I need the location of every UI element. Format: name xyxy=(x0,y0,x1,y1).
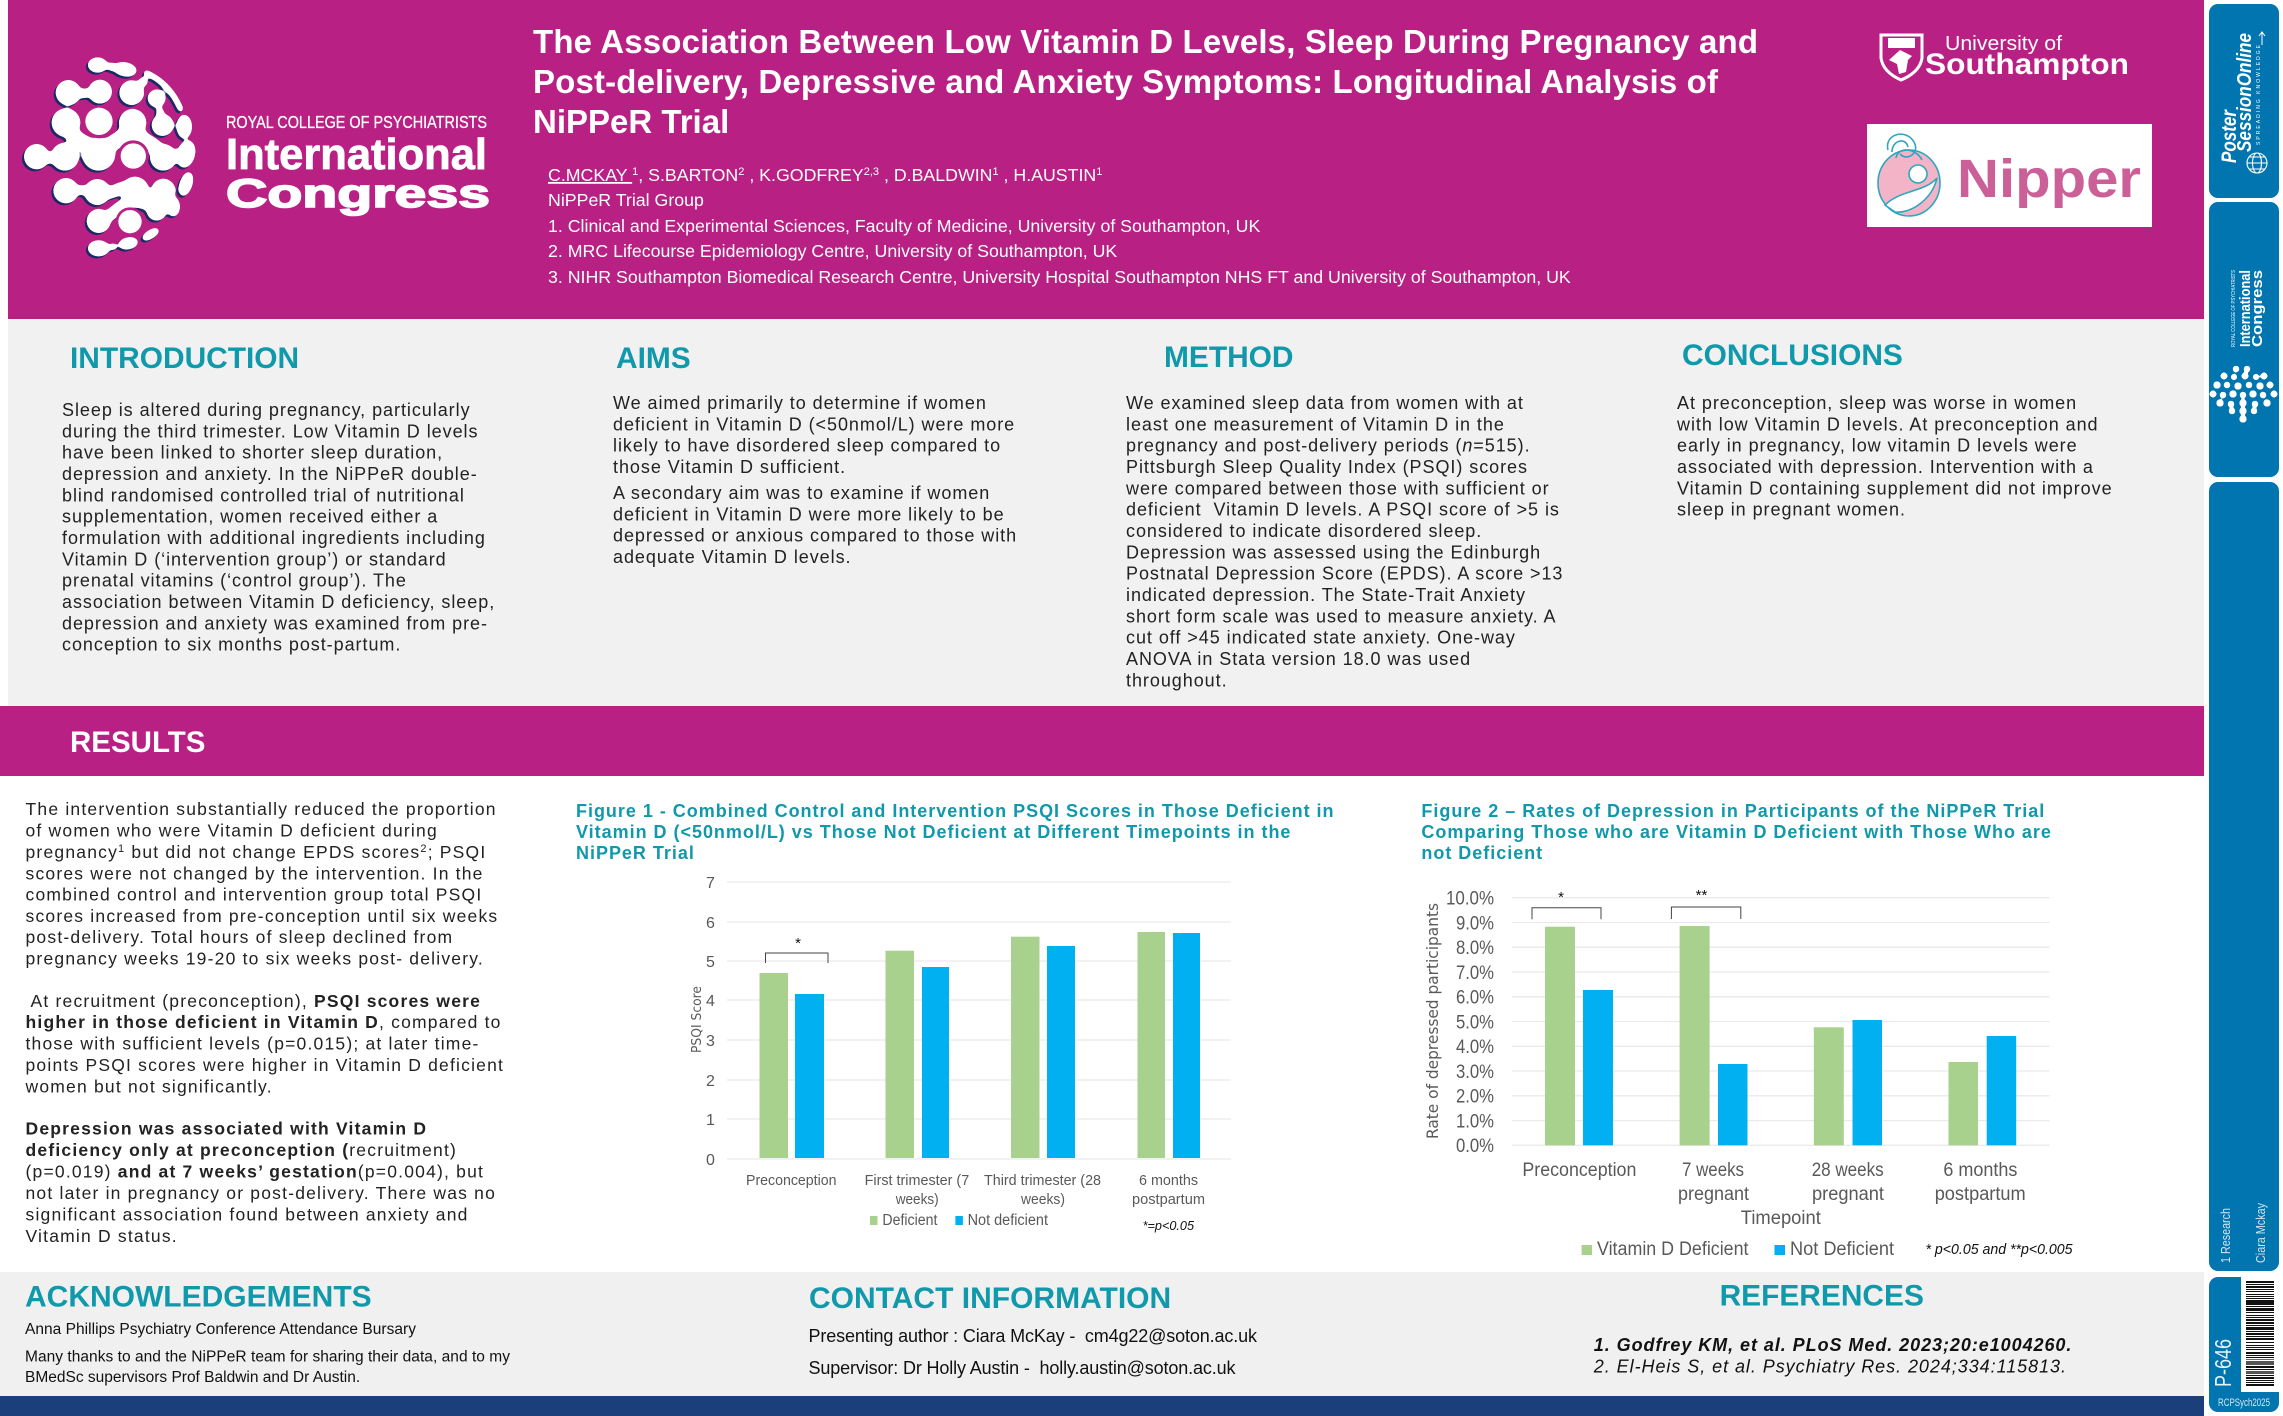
logo: NiPPeR xyxy=(1867,124,2152,227)
text: introduction body xyxy=(62,400,495,655)
category labels: postpartum xyxy=(1935,1184,2026,1205)
category labels: 6 months xyxy=(1139,1172,1198,1189)
bar chart: rates of depression xyxy=(1423,887,2073,1260)
text: method body: Depression was assessed using the Edinburgh xyxy=(1126,542,1541,562)
text: method body: indicated depression. The State-Trait Anxiety xyxy=(1126,585,1526,605)
text: contact details: Presenting author : Ciara McKay - cm4g22@soton.ac.uk xyxy=(808,1326,1258,1346)
text: method body: short form scale was used to measure anxiety. A xyxy=(1126,606,1556,626)
figure 1 title: Vitamin D (<50nmol/L) vs Those Not Deficient at Different Timepoints in the xyxy=(576,822,1291,842)
legend xyxy=(870,1212,1049,1229)
text: conclusions body: with low Vitamin D levels. At preconception and xyxy=(1676,414,2099,434)
footer panel background xyxy=(0,1272,2204,1396)
text: method body: Pittsburgh Sleep Quality Index (PSQI) scores xyxy=(1126,457,1528,477)
y axis ticks: 1.0% xyxy=(1456,1111,1494,1132)
text: conclusions body: Vitamin D containing supplement did not improve xyxy=(1677,478,2113,498)
heading: acknowledgements: ACKNOWLEDGEMENTS xyxy=(25,1281,372,1314)
text: results body: scores were not changed by the intervention. In the xyxy=(26,863,484,883)
y axis ticks: 0.0% xyxy=(1456,1136,1494,1157)
icon: stag in shield xyxy=(1888,38,1915,74)
y axis ticks: 1 xyxy=(706,1112,715,1129)
sidebar panel: poster number and barcode xyxy=(2209,1277,2280,1412)
icon: globe xyxy=(2247,153,2267,173)
sidebar logo text: Poster: Poster xyxy=(2218,109,2241,163)
y axis ticks: 4.0% xyxy=(1456,1037,1494,1058)
text: results body: Depression was associated with Vitamin D xyxy=(26,1119,427,1139)
y axis ticks: 2 xyxy=(706,1073,715,1090)
text: introduction body: conception to six months post-partum. xyxy=(62,635,401,655)
authors and affiliations: 3. NIHR Southampton Biomedical Research Centre, University Hospital Southampton NHS FT and University of Southampton, UK xyxy=(548,267,1571,287)
sidebar logo text: SessionOnline: SessionOnline xyxy=(2234,33,2256,152)
legend: Not deficient xyxy=(968,1212,1049,1229)
text: conclusions body: At preconception, sleep was worse in women xyxy=(1677,393,2077,413)
text: results body: of women who were Vitamin D deficient during xyxy=(26,820,438,840)
category labels: weeks) xyxy=(895,1191,939,1208)
text: acknowledgements: Many thanks to and the NiPPeR team for sharing their data, and to my xyxy=(25,1349,510,1366)
text: introduction body: association between Vitamin D deficiency, sleep, xyxy=(62,592,495,612)
text: results body: scores increased from pre-conception until six weeks xyxy=(26,906,498,926)
text: aims body: adequate Vitamin D levels. xyxy=(613,547,852,567)
y axis ticks: 5 xyxy=(706,954,715,971)
legend: Deficient xyxy=(882,1212,938,1229)
title: NiPPeR Trial xyxy=(533,103,729,140)
vitamin D deficient bars xyxy=(1545,926,1978,1145)
authors and affiliations: 1. Clinical and Experimental Sciences, Faculty of Medicine, University of Southampton, UK xyxy=(548,216,1260,236)
significance note: * p<0.05 and **p<0.005 xyxy=(1926,1241,2073,1258)
text: introduction body: supplementation, women received either a xyxy=(62,507,438,527)
authors and affiliations: 2 xyxy=(738,166,744,178)
sidebar text: category: 1 Research xyxy=(2218,1208,2233,1263)
significance star: * xyxy=(795,935,801,952)
text: results body: women but not significantly. xyxy=(24,1076,273,1096)
barcode xyxy=(2246,1281,2274,1386)
sidebar strapline: SPREADING KNOWLEDGE xyxy=(2256,44,2262,145)
y axis ticks: 7.0% xyxy=(1456,963,1494,984)
text: introduction body: during the third trimester. Low Vitamin D levels xyxy=(62,421,478,441)
category labels: 7 weeks xyxy=(1682,1160,1744,1181)
text: method body: Postnatal Depression Score (EPDS). A score >13 xyxy=(1126,564,1563,584)
title xyxy=(533,23,1758,140)
figure 2 title: Figure 2 – Rates of Depression in Participants of the NiPPeR Trial xyxy=(1421,801,2045,821)
authors and affiliations: , S.BARTON xyxy=(638,165,738,185)
authors and affiliations: 1 xyxy=(632,166,638,178)
figure 2 title xyxy=(1421,801,2052,863)
icon: arrow xyxy=(2259,32,2265,45)
text: method body: pregnancy and post-delivery periods (n=515). xyxy=(1126,436,1531,456)
text: results body: not later in pregnancy or post-delivery. There was no xyxy=(26,1183,496,1203)
heading: references: REFERENCES xyxy=(1720,1280,1924,1313)
logo text: University of: University of xyxy=(1945,33,2062,55)
text: method body: deficient Vitamin D levels. A PSQI score of >5 is xyxy=(1126,500,1560,520)
sidebar logo text: International: International xyxy=(2237,270,2254,347)
authors and affiliations: 1 xyxy=(1096,166,1102,178)
y axis ticks: 3 xyxy=(706,1033,715,1050)
text: introduction body: Vitamin D (‘intervention group’) or standard xyxy=(62,549,447,569)
legend: Vitamin D Deficient xyxy=(1597,1239,1749,1260)
significance stars: * xyxy=(1558,889,1564,906)
text: conclusions body: early in pregnancy, low vitamin D levels were xyxy=(1677,436,2078,456)
not deficient bars xyxy=(795,933,1200,1158)
text: results body: deficiency only at preconception (recruitment) xyxy=(26,1140,457,1160)
logo text: Royal College: ROYAL COLLEGE OF PSYCHIATRISTS xyxy=(226,112,487,132)
significance brackets xyxy=(1532,907,1741,919)
authors and affiliations: , D.BALDWIN xyxy=(879,165,992,185)
y axis ticks xyxy=(1446,888,1494,1157)
text: results body: The intervention substantially reduced the proportion xyxy=(26,799,497,819)
significance stars: ** xyxy=(1696,887,1707,904)
title: The Association Between Low Vitamin D Levels, Sleep During Pregnancy and xyxy=(533,23,1758,60)
text: results body: those with sufficient levels (p=0.015); at later time- xyxy=(26,1034,480,1054)
text: method body: considered to indicate disordered sleep. xyxy=(1126,521,1482,541)
text: aims body: those Vitamin D sufficient. xyxy=(613,457,846,477)
authors and affiliations: 1 xyxy=(992,166,999,178)
sidebar text: author: Ciara Mckay xyxy=(2253,1203,2268,1263)
category labels: pregnant xyxy=(1678,1184,1750,1205)
y axis ticks: 0 xyxy=(706,1152,715,1169)
category labels: postpartum xyxy=(1132,1191,1205,1208)
y axis ticks: 5.0% xyxy=(1456,1012,1494,1033)
barcode background xyxy=(2241,1277,2280,1392)
y axis title: PSQI Score xyxy=(690,986,705,1053)
authors and affiliations: , H.AUSTIN xyxy=(999,165,1096,185)
authors and affiliations: 2. MRC Lifecourse Epidemiology Centre, University of Southampton, UK xyxy=(548,241,1117,261)
text: aims body: depressed or anxious compared to those with xyxy=(613,526,1017,546)
icon detail: separated discs xyxy=(83,105,116,138)
text: acknowledgements xyxy=(25,1321,510,1386)
authors and affiliations: , K.GODFREY xyxy=(744,165,864,185)
icon: university shield xyxy=(1881,35,1922,80)
text: contact details: Supervisor: Dr Holly Austin - holly.austin@soton.ac.uk xyxy=(808,1358,1236,1378)
authors and affiliations: 2,3 xyxy=(864,166,879,178)
text: conclusions body: associated with depression. Intervention with a xyxy=(1677,457,2094,477)
text: results body: pregnancy xyxy=(26,842,118,862)
authors and affiliations: NiPPeR Trial Group xyxy=(548,190,704,210)
category labels: Preconception xyxy=(1522,1160,1636,1181)
text: method body xyxy=(1125,393,1563,690)
heading: conclusions: CONCLUSIONS xyxy=(1682,339,1903,372)
text: results body: higher in those deficient in Vitamin D, compared to xyxy=(26,1012,502,1032)
sidebar logo text: Congress: Congress xyxy=(2249,270,2266,347)
text: contact details xyxy=(808,1326,1258,1378)
heading: method: METHOD xyxy=(1164,341,1294,374)
text: results body: 1 xyxy=(118,843,125,855)
sidebar panel: Poster Session Online xyxy=(2209,4,2279,198)
figure 1 title: Figure 1 - Combined Control and Intervention PSQI Scores in Those Deficient in xyxy=(576,801,1335,821)
figure 1 title: NiPPeR Trial xyxy=(576,843,695,863)
text: results body: pregnancy weeks 19-20 to six weeks post- delivery. xyxy=(26,949,484,969)
y axis ticks: 3.0% xyxy=(1456,1062,1494,1083)
category labels: 28 weeks xyxy=(1812,1160,1884,1181)
y axis ticks: 9.0% xyxy=(1456,913,1494,934)
category labels: weeks) xyxy=(1020,1191,1065,1208)
category labels: 6 months xyxy=(1943,1160,2017,1181)
text: results body: post-delivery. Total hours of sleep declined from xyxy=(26,927,453,947)
text: method body: ANOVA in Stata version 18.0 was used xyxy=(1126,649,1471,669)
navy footer strip xyxy=(0,1396,2204,1416)
figure 1 title xyxy=(576,801,1335,863)
y axis ticks: 4 xyxy=(706,993,715,1010)
text: aims body xyxy=(613,393,1017,567)
text: results body: combined control and intervention group total PSQI xyxy=(26,885,482,905)
significance stars xyxy=(1558,887,1707,906)
category labels: Preconception xyxy=(746,1172,836,1189)
text: method body: cut off >45 indicated state anxiety. One-way xyxy=(1126,628,1516,648)
text: introduction body: depression and anxiety was examined from pre- xyxy=(62,613,488,633)
text: introduction body: prenatal vitamins (‘control group’). The xyxy=(62,571,407,591)
text: results body: 2 xyxy=(420,843,428,855)
text: aims body: We aimed primarily to determine if women xyxy=(613,393,987,413)
category labels: First trimester (7 xyxy=(865,1172,969,1189)
logo text: International: International xyxy=(226,130,487,179)
category labels: pregnant xyxy=(1812,1184,1885,1205)
heading: aims: AIMS xyxy=(616,342,691,375)
text: results body: significant association found between anxiety and xyxy=(26,1204,469,1224)
text: method body: were compared between those with sufficient or xyxy=(1125,478,1550,498)
heading: introduction: INTRODUCTION xyxy=(70,342,299,375)
text: references: 2. El-Heis S, et al. Psychiatry Res. 2024;334:115813. xyxy=(1593,1357,2066,1377)
y axis ticks: 6.0% xyxy=(1456,988,1494,1009)
figure 2 title: Comparing Those who are Vitamin D Deficient with Those Who are xyxy=(1421,822,2052,842)
y axis ticks: 6 xyxy=(706,915,715,932)
not deficient bars xyxy=(1583,990,2016,1145)
text: introduction body: have been linked to shorter sleep duration, xyxy=(62,443,443,463)
bar chart: PSQI scores xyxy=(690,875,1231,1233)
category labels: Third trimester (28 xyxy=(984,1172,1101,1189)
text: method body: throughout. xyxy=(1126,670,1228,690)
y axis ticks: 2.0% xyxy=(1456,1087,1494,1108)
text: results body: At recruitment (preconception), PSQI scores were xyxy=(30,991,481,1011)
text: acknowledgements: BMedSc supervisors Prof Baldwin and Dr Austin. xyxy=(25,1369,360,1386)
deficient bars xyxy=(760,932,1165,1158)
sidebar logo text: royal college: ROYAL COLLEGE OF PSYCHIATRISTS xyxy=(2231,269,2237,347)
y axis title: Rate of depressed participants xyxy=(1423,903,1442,1139)
logo: Royal College of Psychiatrists International Congress xyxy=(24,57,490,256)
header band xyxy=(8,0,2204,319)
text: aims body: deficient in Vitamin D were more likely to be xyxy=(613,504,1005,524)
text: method body: We examined sleep data from women with at xyxy=(1126,393,1524,413)
category labels xyxy=(746,1172,1205,1208)
logo text: Congress: Congress xyxy=(226,172,490,216)
text: method body: least one measurement of Vitamin D in the xyxy=(1126,414,1505,434)
figure 2 title: not Deficient xyxy=(1421,843,1543,863)
text: references xyxy=(1593,1335,2071,1377)
upper text panel background xyxy=(8,319,2204,706)
text: results body xyxy=(24,799,504,1246)
text: aims body: deficient in Vitamin D (<50nmol/L) were more xyxy=(613,414,1015,434)
y axis ticks: 10.0% xyxy=(1446,888,1494,910)
heading: results: RESULTS xyxy=(70,726,206,759)
authors and affiliations: C.MCKAY xyxy=(548,165,632,185)
text: acknowledgements: Anna Phillips Psychiatry Conference Attendance Bursary xyxy=(25,1321,416,1338)
text: introduction body: blind randomised controlled trial of nutritional xyxy=(62,485,465,505)
heading: contact information: CONTACT INFORMATION xyxy=(809,1282,1171,1315)
category labels: Timepoint xyxy=(1741,1208,1821,1229)
authors and affiliations xyxy=(548,165,1571,287)
text: results body: but did not change EPDS scores xyxy=(125,842,420,862)
sidebar panel: International Congress xyxy=(2209,202,2279,477)
icon: molecular globe xyxy=(24,57,198,256)
text: results body: (p=0.019) and at 7 weeks’ gestation(p=0.004), but xyxy=(26,1162,484,1182)
icon: molecular brain xyxy=(2209,366,2278,423)
text: results body: ; PSQI xyxy=(428,842,486,862)
logo text: Nipper: Nipper xyxy=(1957,149,2141,209)
significance note: *=p<0.05 xyxy=(1143,1218,1195,1233)
text: introduction body: Sleep is altered during pregnancy, particularly xyxy=(62,400,471,420)
icon: mother and baby xyxy=(1878,134,1940,216)
text: introduction body: depression and anxiety. In the NiPPeR double- xyxy=(62,464,478,484)
y axis ticks: 7 xyxy=(706,875,715,892)
text: aims body: A secondary aim was to examine if women xyxy=(613,483,990,503)
logo: University of Southampton xyxy=(1881,33,2129,81)
text: conclusions body: sleep in pregnant women. xyxy=(1677,500,1906,520)
title: Post-delivery, Depressive and Anxiety Symptoms: Longitudinal Analysis of xyxy=(533,63,1719,100)
y axis ticks: 8.0% xyxy=(1456,938,1494,959)
logo text: Southampton: Southampton xyxy=(1925,48,2129,81)
sidebar panel: category and author xyxy=(2209,482,2279,1271)
text: results body: points PSQI scores were higher in Vitamin D deficient xyxy=(26,1055,504,1075)
category labels xyxy=(1522,1160,2026,1229)
legend xyxy=(1582,1239,1895,1260)
poster number: P-646 xyxy=(2210,1339,2236,1387)
results band xyxy=(0,706,2204,776)
text: results body: Vitamin D status. xyxy=(26,1226,178,1246)
y axis ticks xyxy=(706,875,715,1169)
text: references: 1. Godfrey KM, et al. PLoS Med. 2023;20:e1004260. xyxy=(1594,1335,2071,1355)
text: aims body: likely to have disordered sleep compared to xyxy=(613,436,1001,456)
legend: Not Deficient xyxy=(1790,1239,1895,1260)
text: introduction body: formulation with additional ingredients including xyxy=(62,528,486,548)
significance bracket xyxy=(766,953,828,963)
text: conclusions body xyxy=(1676,393,2113,520)
